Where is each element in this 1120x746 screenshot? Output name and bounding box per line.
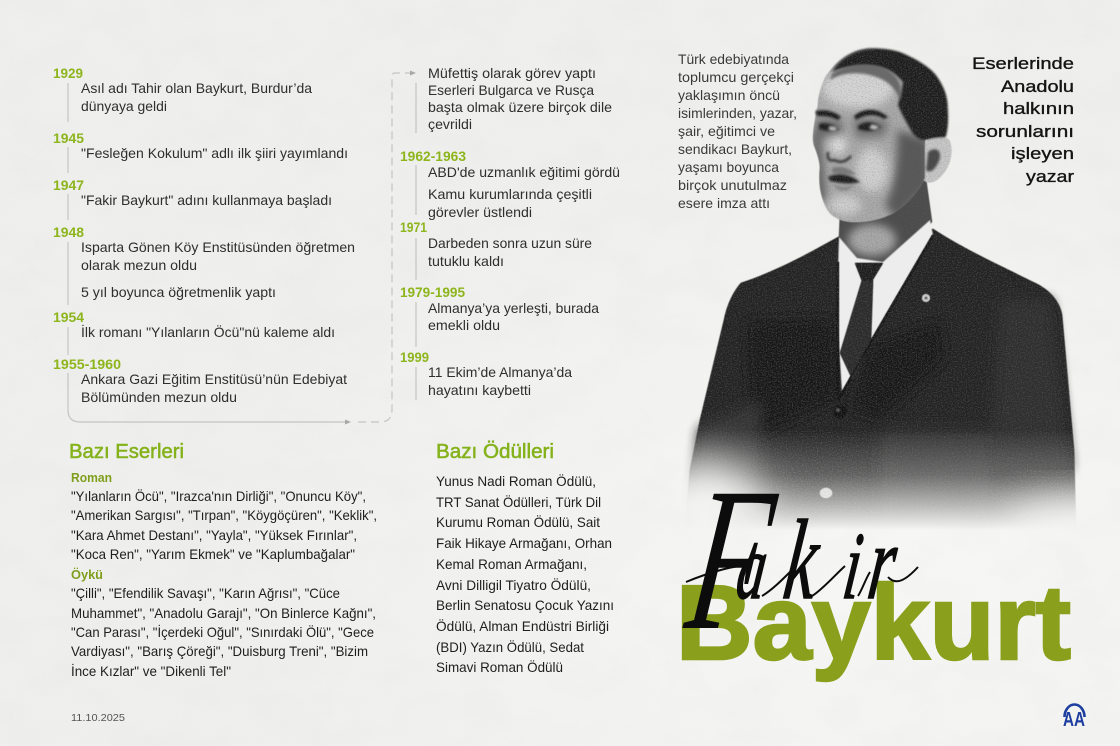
entry 1948: 5 yıl boyunca öğretmenlik yaptı: [81, 284, 276, 300]
quote headline: sorunlarını: [976, 122, 1074, 141]
intro text: Türk edebiyatında: [678, 51, 789, 67]
entry 1954: [53, 309, 335, 355]
facial shadows and highlights: [812, 68, 930, 220]
awards list: Yunus Nadi Roman Ödülü,: [436, 472, 596, 489]
entry 1962-1963: [400, 148, 620, 220]
connector arrow between timeline columns: [68, 70, 416, 424]
entry 1971: Darbeden sonra uzun süre: [428, 235, 592, 251]
intro text: yaklaşımın öncü: [678, 87, 780, 103]
shirt and collar: [838, 220, 933, 392]
entry 1962-1963: ABD'de uzmanlık eğitimi gördü: [428, 164, 620, 180]
quote headline: yazar: [1026, 167, 1074, 186]
entry 1947: "Fakir Baykurt" adını kullanmaya başladı: [81, 192, 332, 208]
entry 1955-1960: [53, 356, 347, 405]
intro text: esere imza attı: [678, 195, 770, 211]
suit: [685, 229, 1076, 530]
awards list: [436, 472, 614, 675]
entry 1945: [53, 130, 348, 173]
entry 1979-1995: emekli oldu: [428, 317, 500, 333]
short story list: [71, 585, 376, 679]
entry 1955-1960: Ankara Gazi Eğitim Enstitüsü’nün Edebiyat: [81, 371, 347, 387]
quote headline: Eserlerinde: [972, 54, 1074, 73]
novel list: "Kara Ahmet Destanı", "Yayla", "Yüksek Fırınlar",: [71, 527, 357, 543]
icon: AA logo: AA: [1063, 709, 1085, 731]
entry 1945: "Fesleğen Kokulum" adlı ilk şiiri yayımlandı: [81, 145, 348, 161]
entry 1955-1960: Bölümünden mezun oldu: [81, 389, 237, 405]
icon: AA logo: [1063, 704, 1085, 731]
entry 1971: [400, 219, 592, 280]
entry 1979-1995: [400, 284, 599, 347]
entry 1999: hayatını kaybetti: [428, 382, 531, 398]
entry 1955-1960: 1955-1960: [53, 356, 121, 372]
continued entry: çevrildi: [428, 116, 472, 132]
awards list: Ödülü, Alman Endüstri Birliği: [436, 617, 609, 634]
entry 1948: 1948: [53, 224, 84, 240]
script flourishes: [686, 565, 918, 596]
lapel pin: [922, 294, 930, 302]
title first name in script style: F: [676, 446, 786, 673]
entry 1948: Isparta Gönen Köy Enstitüsünden öğretmen: [81, 239, 355, 255]
novel list: [71, 487, 377, 562]
entry 1954: 1954: [53, 309, 84, 325]
title surname: Baykurt: [676, 564, 1071, 682]
quote headline: halkının: [1003, 99, 1074, 118]
entry 1929: dünyaya geldi: [81, 98, 167, 114]
awards list: Kurumu Roman Ödülü, Sait: [436, 513, 600, 530]
intro text: yaşamı boyunca: [678, 159, 779, 175]
entry 1947: 1947: [53, 177, 84, 193]
awards list: Faik Hikaye Armağanı, Orhan: [436, 535, 612, 551]
intro text: [678, 51, 797, 211]
awards list: Berlin Senatosu Çocuk Yazını: [436, 597, 614, 613]
novel list: "Yılanların Öcü", "Irazca'nın Dirliği", "Onuncu Köy",: [71, 487, 366, 504]
heading: works: Bazı Eserleri: [69, 441, 184, 463]
timeline right column: [400, 65, 620, 400]
quote headline: işleyen: [1011, 144, 1074, 163]
subheading: novel: Roman: [71, 470, 112, 485]
awards list: Simavi Roman Ödülü: [436, 658, 563, 675]
entry 1999: 1999: [400, 349, 429, 365]
awards list: Avni Dilligil Tiyatro Ödülü,: [436, 576, 591, 593]
entry 1948: olarak mezun oldu: [81, 257, 197, 273]
quote headline: [972, 54, 1074, 186]
entry 1929: 1929: [53, 65, 83, 81]
continued entry: başta olmak üzere birçok dile: [428, 99, 612, 115]
entry 1979-1995: Almanya’ya yerleşti, burada: [428, 300, 599, 316]
jacket button: [834, 406, 846, 418]
lapel lines: [838, 235, 933, 400]
title first name in script style: a: [731, 516, 773, 618]
suit shading: [690, 300, 1070, 530]
panel: awards: [436, 441, 614, 675]
entry 1971: 1971: [400, 219, 427, 235]
awards list: Kemal Roman Armağanı,: [436, 556, 587, 572]
short story list: Vardiyası", "Barış Çöreği", "Duisburg Treni", "Bizim: [71, 643, 368, 659]
ear: [920, 137, 951, 182]
hair: [832, 49, 947, 140]
intro text: sendikacı Baykurt,: [678, 141, 792, 157]
entry 1962-1963: görevler üstlendi: [428, 204, 532, 220]
entry 1945: 1945: [53, 130, 84, 146]
continued entry: Eserleri Bulgarca ve Rusça: [428, 82, 594, 98]
timeline left column: [53, 65, 355, 405]
entry 1948: [53, 224, 355, 305]
entry 1954: İlk romanı "Yılanların Öcü"nü kaleme aldı: [81, 323, 335, 340]
face: [813, 49, 925, 222]
subheading: short story: Öykü: [71, 567, 103, 582]
entry 1999: [400, 349, 572, 400]
tie: [840, 280, 873, 381]
short story list: "Çilli", "Efendilik Savaşı", "Karın Ağrısı", "Cüce: [71, 585, 340, 601]
novel list: "Amerikan Sargısı", "Tırpan", "Köygöçüren", "Keklik",: [71, 507, 377, 523]
title first name in script style: [676, 446, 918, 673]
intro text: toplumcu gerçekçi: [678, 69, 794, 85]
novel list: "Koca Ren", "Yarım Ekmek" ve "Kaplumbağalar": [71, 546, 355, 562]
intro text: birçok unutulmaz: [678, 177, 787, 193]
continued entry: [416, 65, 612, 133]
entry 1962-1963: 1962-1963: [400, 148, 466, 164]
entry 1979-1995: 1979-1995: [400, 284, 465, 300]
awards list: TRT Sanat Ödülleri, Türk Dil: [436, 493, 601, 510]
title first name in script style: i: [838, 513, 868, 620]
awards list: (BDI) Yazın Ödülü, Sedat: [436, 638, 584, 655]
lower button: [820, 488, 832, 498]
quote headline: Anadolu: [1001, 77, 1074, 96]
eyes and brows: [816, 110, 888, 191]
entry 1999: 11 Ekim’de Almanya’da: [428, 364, 572, 380]
short story list: "Can Parası", "İçerdeki Oğul", "Sınırdaki Ölü", "Gece: [71, 623, 374, 640]
title first name in script style: k: [778, 496, 827, 623]
date: 11.10.2025: [71, 712, 125, 724]
entry 1971: tutuklu kaldı: [428, 253, 504, 269]
panel: works: [69, 441, 377, 679]
intro text: şair, eğitimci ve: [678, 123, 775, 139]
heading: awards: Bazı Ödülleri: [436, 441, 554, 463]
portrait photo of Fakir Baykurt: [685, 49, 1076, 530]
entry 1929: [53, 65, 312, 122]
short story list: Muhammet", "Anadolu Garajı", "On Binlerce Kağnı",: [71, 605, 376, 621]
entry 1962-1963: Kamu kurumlarında çeşitli: [428, 186, 592, 202]
continued entry: Müfettiş olarak görev yaptı: [428, 65, 596, 81]
neck: [839, 172, 932, 263]
title first name in script style: r: [862, 505, 904, 622]
entry 1929: Asıl adı Tahir olan Baykurt, Burdur’da: [81, 80, 312, 96]
entry 1947: [53, 177, 332, 220]
short story list: İnce Kızlar" ve "Dikenli Tel": [71, 662, 231, 679]
intro text: isimlerinden, yazar,: [678, 105, 797, 121]
